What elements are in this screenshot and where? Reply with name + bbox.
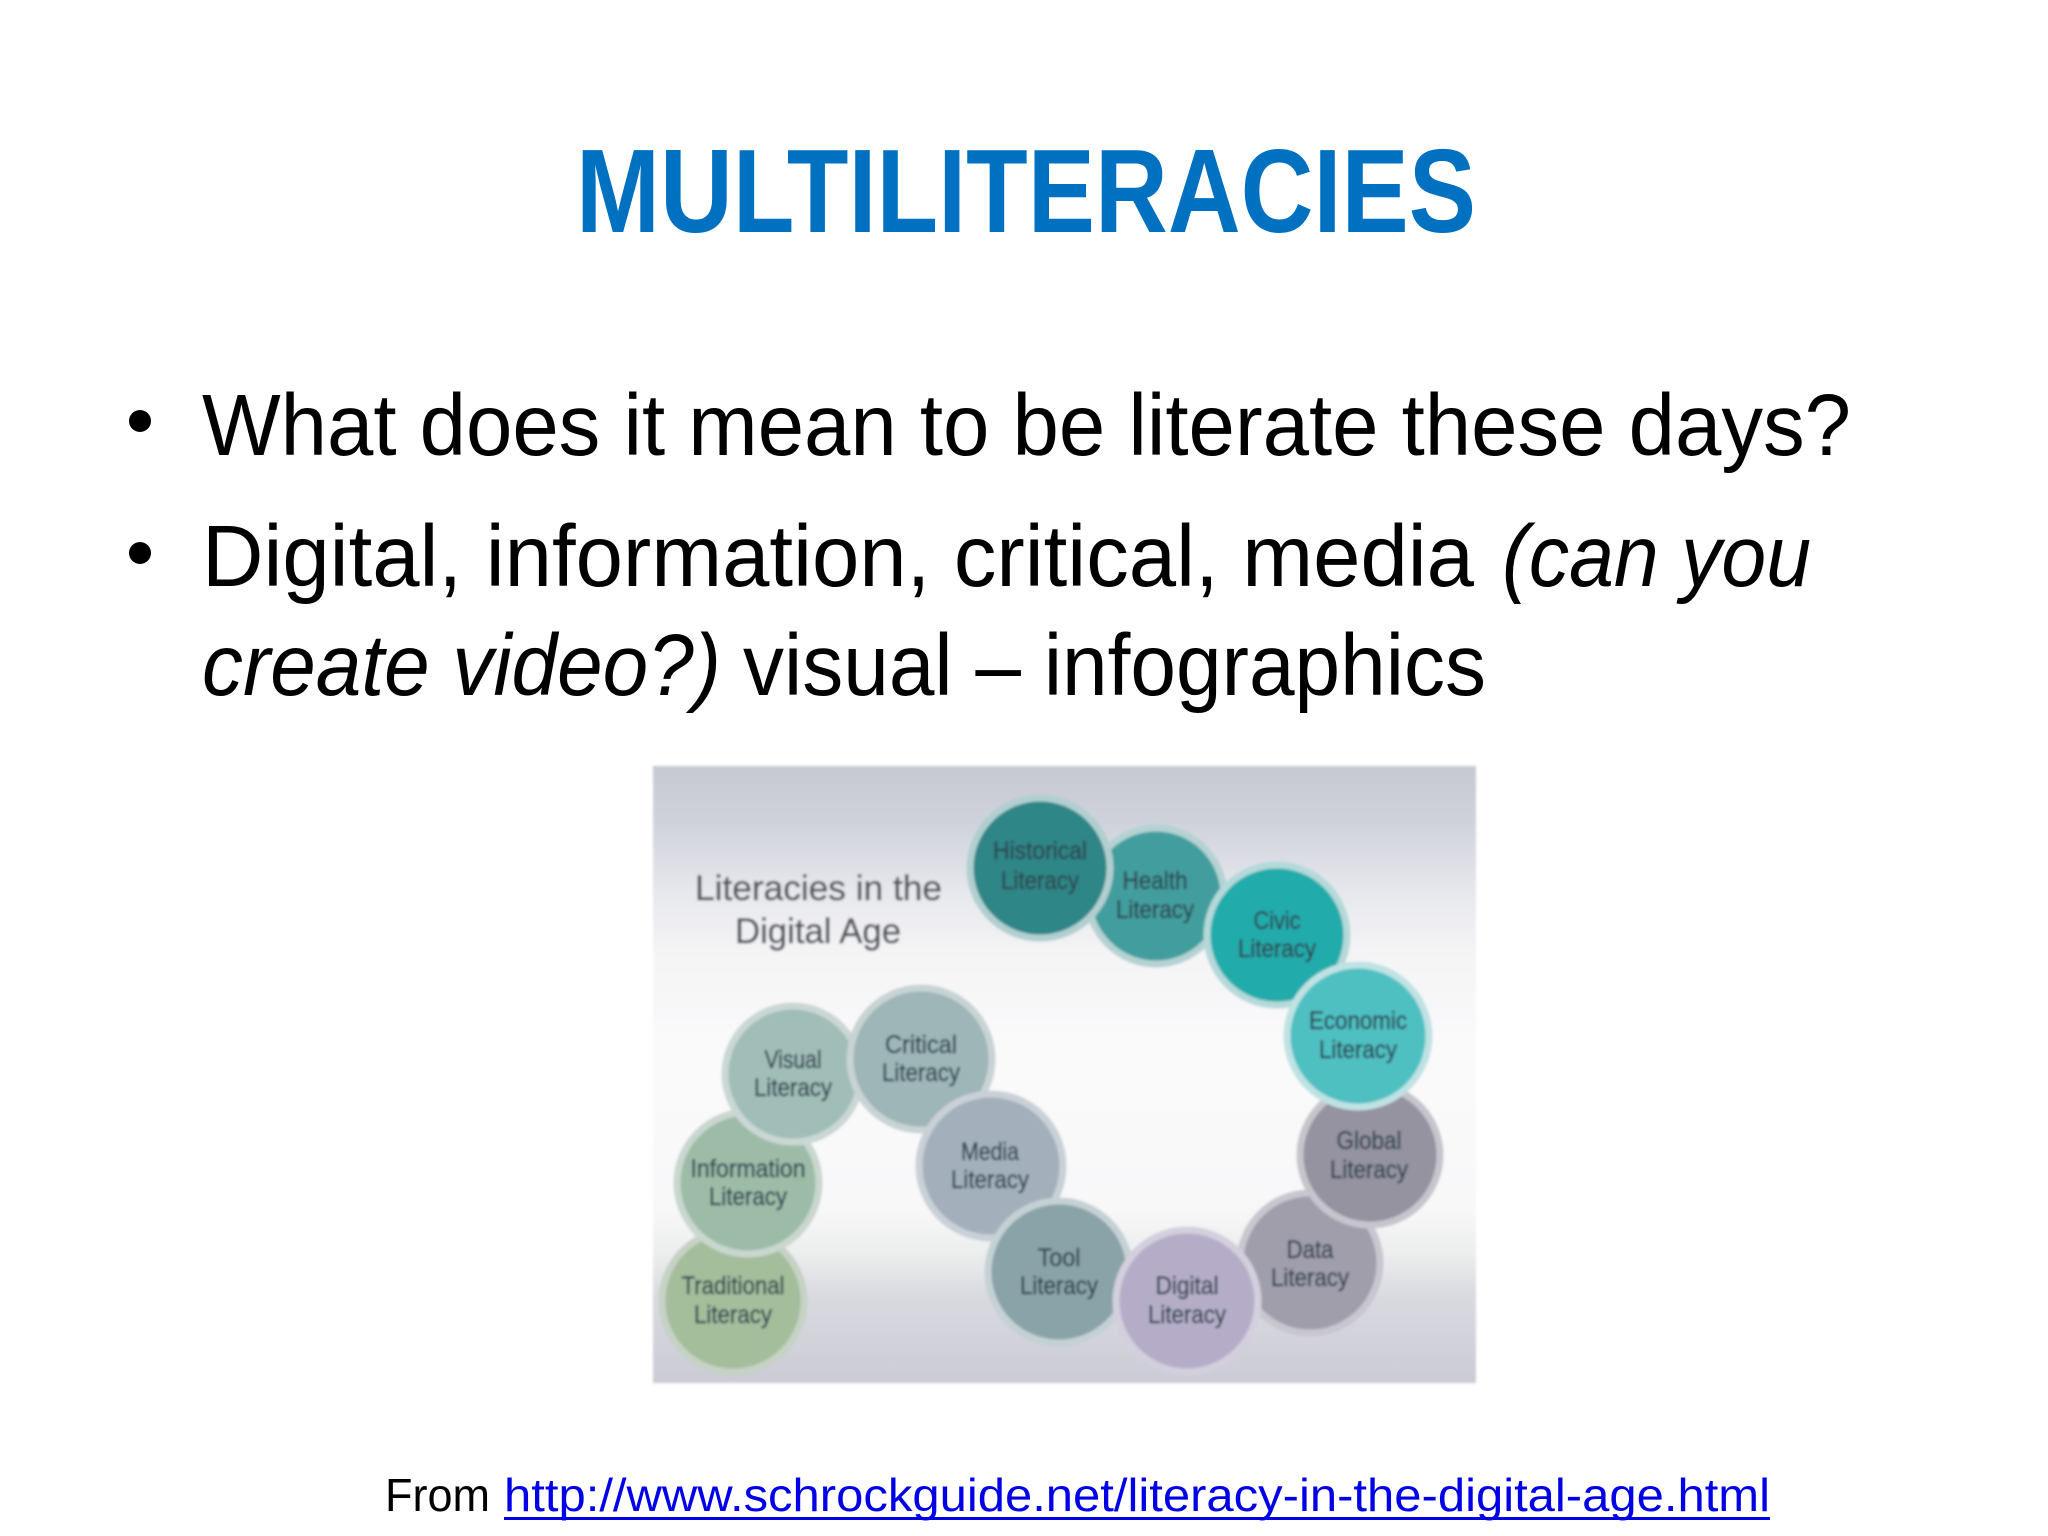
circle: Global Literacy [1300, 1085, 1440, 1225]
panel: Literacies in the Digital Age image [653, 766, 1476, 1383]
circle: Information Literacy: Information [690, 1155, 806, 1183]
circle: Data Literacy: Data [1286, 1236, 1334, 1264]
circle: Global Literacy: Literacy [1330, 1156, 1408, 1184]
bullet: second point: visual – infographics [743, 617, 1486, 714]
circle: Health Literacy [1088, 828, 1224, 964]
circle: Traditional Literacy [662, 1230, 804, 1372]
circle: Visual Literacy: Literacy [754, 1074, 832, 1102]
circle: Civic Literacy: Civic [1254, 907, 1300, 935]
circle: Civic Literacy: Literacy [1238, 935, 1316, 963]
image heading [695, 869, 942, 951]
circle: Media Literacy: Literacy [951, 1166, 1029, 1194]
circle: Media Literacy: Media [961, 1138, 1019, 1166]
image heading: Literacies in the [695, 869, 942, 908]
title: MULTILITERACIES [576, 125, 1476, 258]
bullet: second point: (can you [1502, 508, 1811, 605]
circle: Information Literacy: Literacy [709, 1183, 787, 1211]
circle: Critical Literacy: Critical [885, 1031, 957, 1059]
circle: Critical Literacy: Literacy [882, 1059, 960, 1087]
bullet: second point: Digital, information, critical, media [202, 508, 1475, 605]
bullet: second point [129, 508, 1811, 714]
circle: Visual Literacy: Visual [764, 1046, 822, 1074]
circle: Economic Literacy: Literacy [1319, 1036, 1397, 1064]
circle: Digital Literacy: Literacy [1148, 1301, 1226, 1329]
circle: Critical Literacy [850, 988, 992, 1130]
circle: Historical Literacy [970, 798, 1110, 938]
circle: Information Literacy [677, 1112, 819, 1254]
circle: Global Literacy: Global [1336, 1127, 1402, 1155]
source credit: http://www.schrockguide.net/literacy-in-the-digital-age.html [504, 1469, 1770, 1521]
circle: Media Literacy [919, 1094, 1063, 1238]
circle: Data Literacy [1240, 1193, 1380, 1333]
circle: Tool Literacy: Literacy [1020, 1272, 1098, 1300]
circle: Health Literacy: Health [1122, 867, 1188, 895]
circle: Traditional Literacy: Literacy [694, 1301, 772, 1329]
source credit: From [385, 1469, 490, 1521]
circle: Tool Literacy: Tool [1038, 1244, 1080, 1272]
circle: Health Literacy: Literacy [1116, 896, 1194, 924]
circle: Civic Literacy [1207, 865, 1347, 1005]
circle: Economic Literacy: Economic [1309, 1007, 1407, 1035]
circle: Digital Literacy [1116, 1230, 1258, 1372]
circle: Historical Literacy: Literacy [1001, 867, 1079, 895]
bullet list [129, 377, 1851, 714]
circle: Tool Literacy [988, 1201, 1130, 1343]
circle: Traditional Literacy: Traditional [682, 1272, 784, 1300]
circle: Historical Literacy: Historical [993, 837, 1087, 865]
image heading: Digital Age [735, 912, 901, 951]
bullet: second point: create video?) [202, 617, 721, 714]
bullet: first question: What does it mean to be literate these days? [202, 377, 1851, 474]
circle: Digital Literacy: Digital [1156, 1272, 1218, 1300]
circle: Visual Literacy [725, 1006, 861, 1142]
circle: Data Literacy: Literacy [1271, 1264, 1349, 1292]
circle: Economic Literacy [1287, 965, 1429, 1107]
